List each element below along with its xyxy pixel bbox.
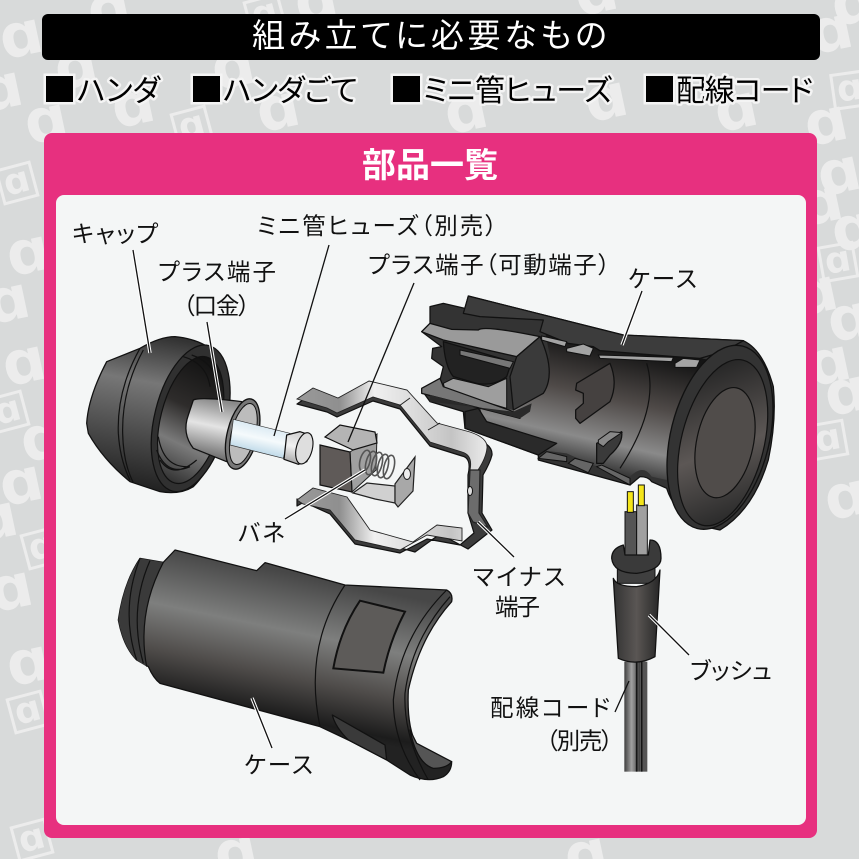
- leader lines: [133, 245, 689, 748]
- background: grey with "a" watermark pattern: ɑ: [24, 523, 59, 570]
- cap body: [87, 337, 244, 500]
- background: grey with "a" watermark pattern: ɑ: [105, 66, 161, 143]
- background: grey with "a" watermark pattern: ɑ: [48, 28, 104, 105]
- background: grey with "a" watermark pattern: ɑ: [798, 84, 854, 161]
- panel: parts list: [44, 133, 817, 838]
- labels: （口金）: [183, 293, 250, 319]
- illustration: case (interior view): [422, 296, 791, 540]
- background: grey with "a" watermark pattern: ɑ: [18, 82, 74, 159]
- labels: （別売）: [546, 728, 613, 754]
- title: 組み立てに必要なもの: [252, 17, 607, 54]
- background: grey with "a" watermark pattern: ɑ: [14, 400, 70, 477]
- labels: 端子: [495, 594, 540, 620]
- panel heading: 部品一覧: [362, 147, 498, 185]
- labels: ミニ管ヒューズ（別売）: [257, 213, 497, 239]
- background: grey with "a" watermark pattern: ɑ: [801, 324, 857, 401]
- labels: ケース: [628, 266, 697, 292]
- required items list: 配線コード: [676, 75, 813, 108]
- labels: プラス端子（可動端子）: [368, 252, 610, 278]
- labels: ケース: [244, 752, 313, 778]
- background: grey with "a" watermark pattern: ɑ: [821, 238, 854, 283]
- labels: キャップ: [72, 221, 159, 247]
- illustration: plus terminal (movable) with spring: [320, 425, 415, 507]
- required items list: [44, 74, 813, 108]
- required items list: ハンダごて: [223, 75, 358, 108]
- background: grey with "a" watermark pattern: ɑ: [205, 28, 261, 105]
- background: grey with "a" watermark pattern: ɑ: [811, 416, 844, 461]
- illustration: case (exterior view): [118, 550, 452, 780]
- required items list: ハンダ: [77, 75, 161, 108]
- labels: バネ: [238, 520, 285, 546]
- panel body: [56, 195, 806, 825]
- background: grey with "a" watermark pattern: ɑ: [250, 70, 306, 147]
- illustration: minus terminal: [297, 381, 492, 553]
- background: grey with "a" watermark pattern: ɑ: [708, 70, 764, 147]
- required items list: ミニ管ヒューズ: [423, 75, 612, 108]
- background: grey with "a" watermark pattern: ɑ: [0, 624, 56, 701]
- title bar: [42, 14, 820, 60]
- labels: ブッシュ: [690, 658, 772, 684]
- illustration: wiring cord with bush: [612, 485, 661, 772]
- background: grey with "a" watermark pattern: ɑ: [0, 214, 56, 291]
- labels: 配線コード: [490, 695, 610, 721]
- labels: プラス端子: [158, 259, 276, 285]
- background: grey with "a" watermark pattern: ɑ: [10, 687, 45, 734]
- labels: [72, 213, 772, 778]
- background: grey with "a" watermark pattern: ɑ: [793, 164, 849, 241]
- background: grey with "a" watermark pattern: ɑ: [438, 72, 494, 149]
- labels: マイナス: [473, 564, 565, 590]
- background: grey with "a" watermark pattern: ɑ: [174, 102, 209, 149]
- background: grey with "a" watermark pattern: ɑ: [788, 254, 844, 331]
- illustration: cap and fuse: [87, 337, 316, 500]
- fuse holder and fuse: [186, 395, 316, 473]
- background: grey with "a" watermark pattern: ɑ: [578, 60, 634, 137]
